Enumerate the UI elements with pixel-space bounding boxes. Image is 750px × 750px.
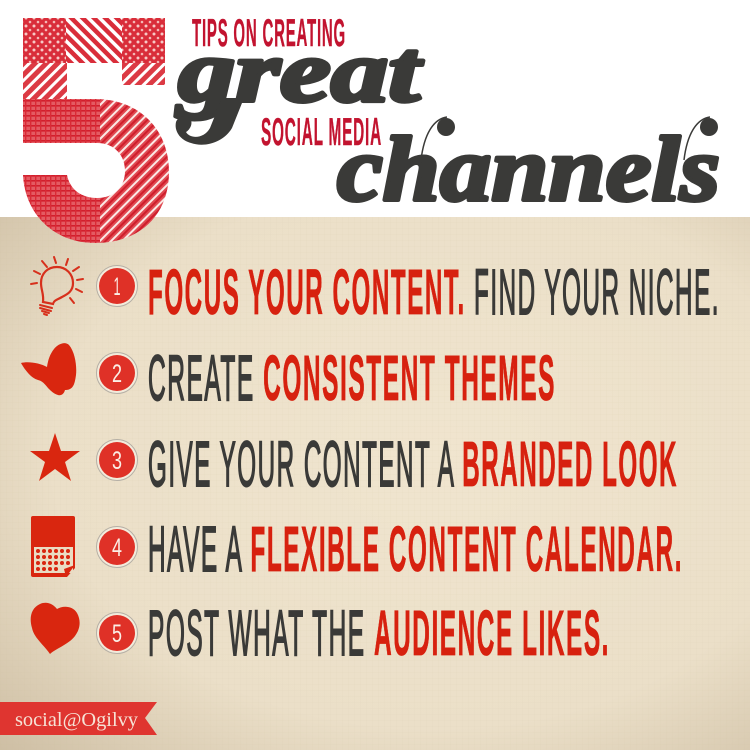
- number badge 3: 3: [112, 447, 122, 475]
- ribbon: social@Ogilvy: social@Ogilvy: [15, 710, 138, 731]
- icon: star: [30, 433, 80, 481]
- tip row 1: [31, 256, 720, 328]
- heading: channels: channels: [337, 118, 720, 220]
- heading: great: great: [175, 24, 423, 121]
- tip row 5: [31, 597, 610, 669]
- big number 5: [20, 15, 172, 245]
- tip row 2: [21, 342, 556, 414]
- number badge 2: 2: [112, 360, 122, 388]
- text: SOCIAL MEDIA: [261, 111, 382, 154]
- number badge 2: [96, 352, 138, 394]
- heading: great: [175, 24, 423, 145]
- number badge 5: [96, 612, 138, 654]
- number badge 5: 5: [112, 620, 122, 648]
- tip row 3: [30, 428, 678, 500]
- number badge 3: [96, 440, 138, 480]
- text: TIPS ON CREATING: [192, 12, 346, 55]
- tip row 4: [31, 513, 683, 585]
- icon: light bulb: [31, 257, 83, 315]
- icon: butterfly: [21, 343, 76, 395]
- background panel: [0, 217, 750, 750]
- ribbon: social@Ogilvy: [0, 702, 157, 735]
- icon: heart: [31, 603, 80, 654]
- icon: calendar: [31, 516, 75, 577]
- number badge 4: 4: [112, 534, 122, 562]
- number badge 4: [96, 526, 138, 568]
- number badge 1: 1: [114, 273, 120, 301]
- number badge 1: [96, 266, 138, 306]
